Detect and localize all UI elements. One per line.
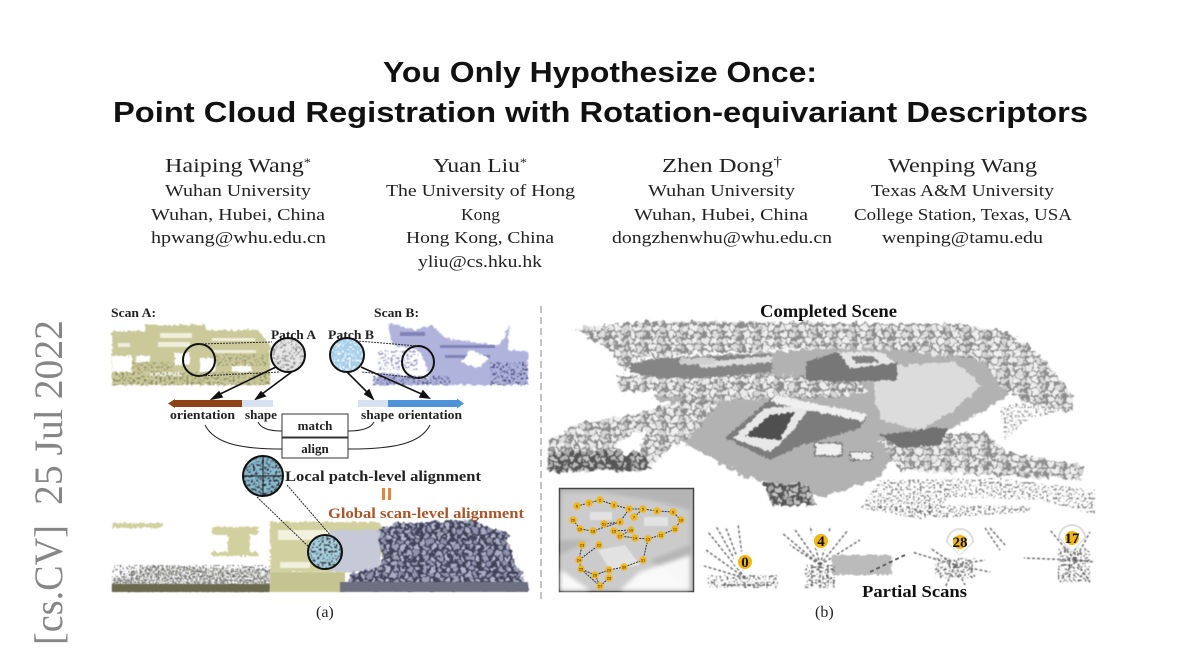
trajectory inset: 8 — [619, 520, 622, 524]
scene point cloud — [548, 322, 1095, 520]
trajectory inset: 23 — [580, 542, 585, 548]
trajectory inset: 11 — [673, 526, 678, 532]
descriptor bar A — [168, 399, 273, 408]
title: You Only Hypothesize Once: — [383, 57, 817, 89]
trajectory inset: 13 — [646, 536, 651, 542]
trajectory inset: 10 — [679, 518, 684, 522]
arrows from patches to descriptors — [212, 367, 429, 399]
trajectory inset: 25 — [579, 566, 584, 572]
trajectory inset: 12 — [659, 532, 664, 538]
align box: align — [301, 441, 329, 456]
author: Zhen Dong: Zhen Dong — [662, 155, 753, 177]
author: Zhen Dong — [612, 155, 833, 247]
trajectory inset: 31 — [641, 558, 646, 562]
marker 28: 28 — [952, 535, 968, 551]
scan A to patch A leaders — [199, 342, 280, 376]
trajectory inset: 20 — [571, 518, 576, 522]
trajectory inset: 1 — [588, 500, 591, 506]
panel: (b) completed scene — [548, 301, 1095, 621]
white gaps and sparse areas — [585, 390, 660, 456]
descriptor labels: orientation — [170, 407, 236, 422]
marker 17: 17 — [1064, 531, 1080, 547]
panel: (a) registration pipeline — [111, 305, 528, 621]
author: Zhen Dong: Wuhan University — [648, 181, 796, 200]
trajectory inset: 17 — [618, 534, 623, 538]
trajectory inset: 29 — [607, 568, 612, 572]
match and align connector curves — [205, 422, 430, 449]
patch B label: Patch B — [328, 327, 374, 342]
descriptor labels: shape — [245, 407, 277, 422]
author: Haiping Wang: Wuhan, Hubei, China — [151, 205, 326, 224]
trajectory inset — [560, 488, 694, 592]
marker 0: 0 — [741, 555, 749, 571]
author: Haiping Wang: hpwang@whu.edu.cn — [151, 228, 327, 247]
author: Yuan Liu — [386, 155, 576, 271]
scan A circle — [183, 344, 215, 376]
trajectory inset: 19 — [578, 526, 583, 532]
scan B label: Scan B: — [374, 305, 419, 320]
author: Yuan Liu: The University of Hong — [386, 181, 576, 200]
trajectory inset: 6 — [656, 508, 659, 514]
author: Zhen Dong: dongzhenwhu@whu.edu.cn — [612, 228, 833, 247]
local alignment label: Local patch-level alignment — [285, 469, 481, 485]
trajectory inset: 18 — [591, 528, 596, 534]
author: Yuan Liu: Yuan Liu — [433, 155, 507, 177]
trajectory inset: 2 — [599, 498, 602, 502]
arXiv side stamp: 25 Jul 2022 — [26, 320, 71, 505]
author: Haiping Wang — [151, 155, 327, 247]
trajectory inset: 16 — [629, 528, 634, 532]
match box: match — [298, 418, 333, 433]
scan B to patch B leaders — [358, 341, 418, 378]
completed scene label: Completed Scene — [760, 301, 897, 321]
trajectory inset: 27 — [598, 584, 603, 588]
merged scene point cloud — [112, 520, 528, 592]
trajectory inset: 28 — [607, 576, 612, 580]
author: Yuan Liu: yliu@cs.hku.hk — [418, 252, 543, 271]
marker 4 — [809, 529, 833, 554]
scan-level circle — [308, 535, 342, 569]
align box — [282, 438, 348, 458]
title — [113, 57, 1088, 129]
author: Yuan Liu: Kong — [461, 205, 501, 224]
equals mark — [382, 488, 391, 500]
author: Haiping Wang: Wuhan University — [165, 181, 312, 200]
arXiv side stamp — [26, 320, 71, 645]
scan B circle — [402, 346, 434, 378]
author: Wenping Wang: wenping@tamu.edu — [882, 228, 1044, 247]
trajectory inset: 14 — [633, 536, 638, 540]
marker 0 — [733, 551, 757, 576]
trajectory inset: 51 — [602, 522, 607, 526]
descriptor labels: orientation — [398, 407, 463, 422]
trajectory inset: 15 — [612, 528, 617, 534]
author: Wenping Wang — [854, 155, 1073, 247]
marker 28 — [946, 528, 974, 556]
marker 17 — [1058, 524, 1086, 552]
global alignment label: Global scan-level alignment — [328, 506, 524, 522]
partial scans label: Partial Scans — [862, 582, 967, 601]
local patch circle — [243, 456, 283, 496]
marker 4: 4 — [817, 534, 825, 550]
descriptor bar B — [358, 398, 464, 408]
patch B — [330, 338, 364, 372]
trajectory inset: 0 — [576, 504, 579, 508]
trajectory inset: 7 — [633, 514, 636, 520]
author: Haiping Wang: * — [304, 155, 311, 169]
trajectory inset: 30 — [622, 564, 627, 570]
trajectory inset: 5 — [642, 506, 645, 512]
scan B point cloud — [373, 323, 528, 385]
trajectory inset: 22 — [597, 542, 602, 548]
patch A label: Patch A — [271, 327, 317, 342]
match box — [282, 414, 348, 437]
author: Zhen Dong: Wuhan, Hubei, China — [634, 205, 809, 224]
title: Point Cloud Registration with Rotation-equivariant Descriptors — [113, 97, 1088, 129]
trajectory inset: 3 — [613, 502, 616, 508]
descriptor labels: shape — [361, 407, 394, 422]
author: Wenping Wang: Texas A&M University — [871, 181, 1055, 200]
descriptor labels — [170, 407, 463, 422]
partial scans point clouds — [704, 524, 1095, 588]
caption b: (b) — [815, 604, 834, 621]
caption a: (a) — [316, 604, 334, 621]
trajectory inset: 26 — [593, 572, 598, 578]
scene buildings — [630, 352, 948, 460]
divider — [540, 306, 542, 600]
patch A — [271, 338, 305, 372]
author: Haiping Wang: Haiping Wang — [165, 155, 280, 177]
author: Wenping Wang: Wenping Wang — [888, 155, 1037, 177]
trajectory inset: 4 — [628, 506, 631, 512]
scan A label: Scan A: — [111, 305, 156, 320]
trajectory inset: 9 — [672, 510, 675, 514]
author: Yuan Liu: * — [520, 155, 527, 169]
author: Zhen Dong: † — [773, 155, 782, 170]
arXiv side stamp: [cs.CV] — [26, 525, 71, 645]
author: Wenping Wang: College Station, Texas, USA — [854, 205, 1073, 224]
trajectory inset: 24 — [577, 558, 582, 562]
author: Yuan Liu: Hong Kong, China — [406, 228, 555, 247]
scan A point cloud — [112, 325, 270, 385]
leader lines from local patch to scan — [257, 485, 332, 550]
